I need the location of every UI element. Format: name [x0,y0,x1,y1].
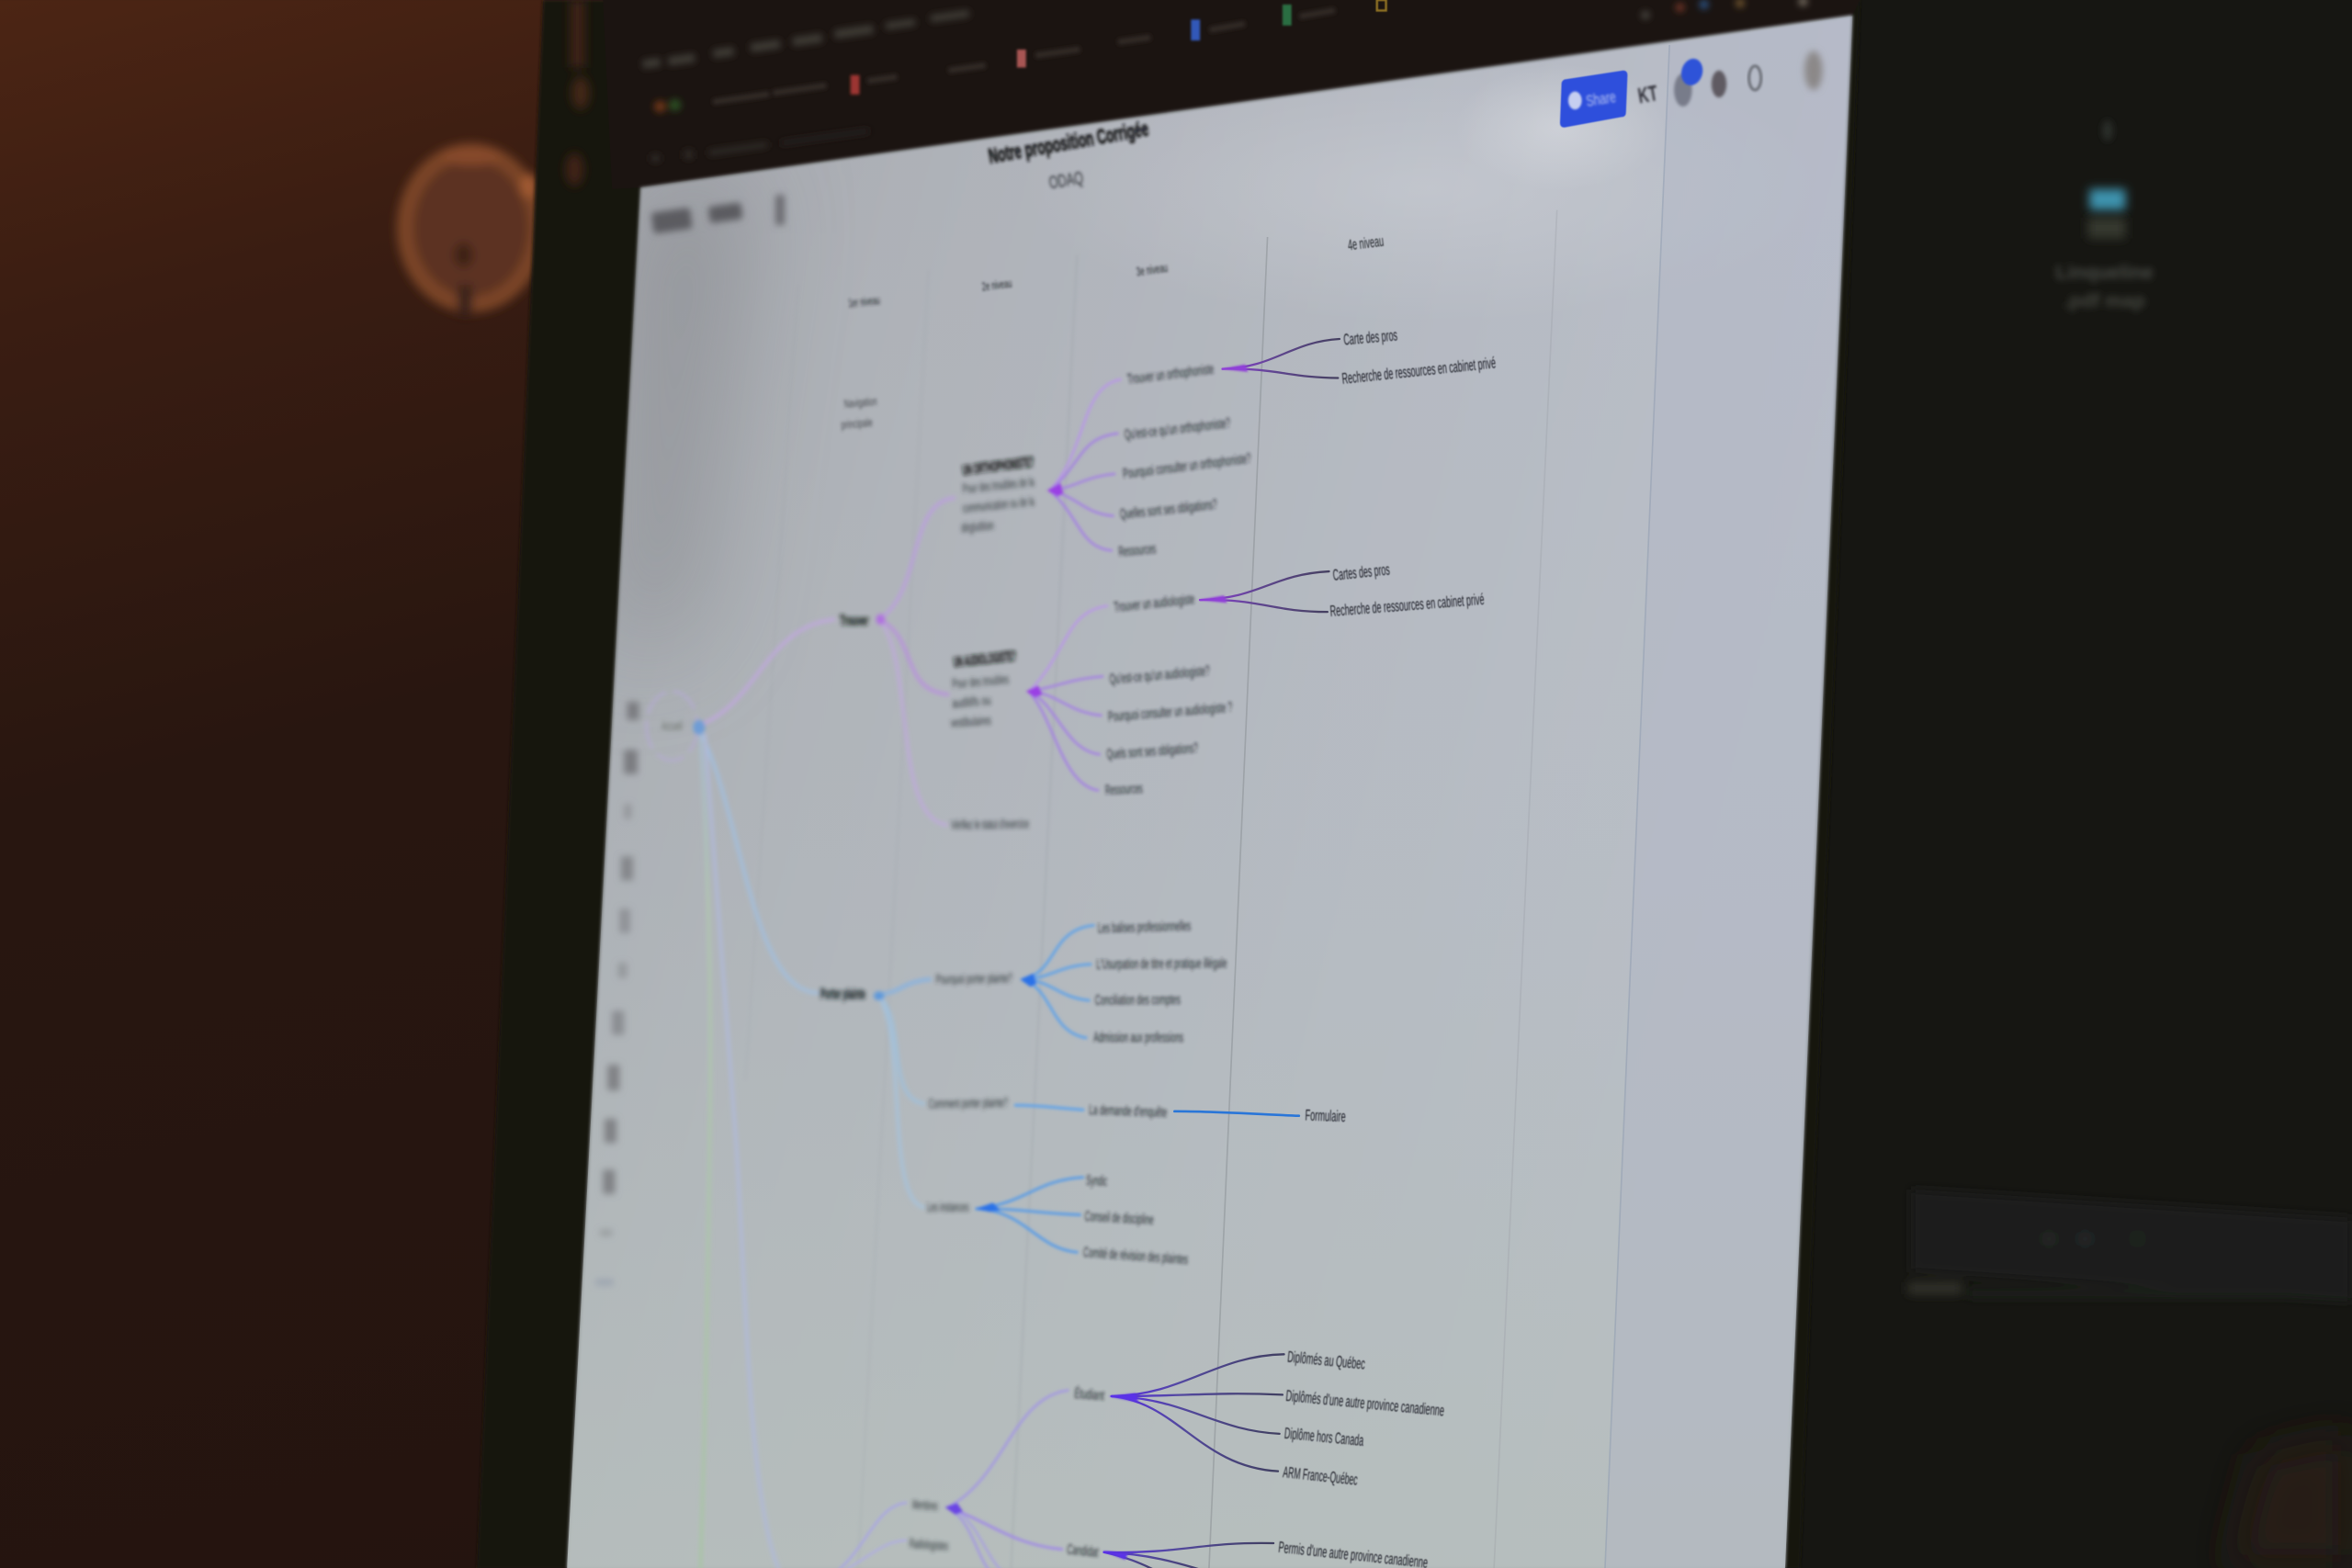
item: Diplôme hors Canada: Diplôme hors Canada [1283,1424,1364,1450]
curves: audiologiste fan [1029,606,1107,790]
desktop dot [2102,120,2113,141]
curve: Trouver un orthophoniste to Carte des pros [1223,339,1340,369]
node: Un orthophoniste: Pour des troubles de la [962,475,1035,497]
lamp outer ring [405,152,537,304]
icon: avatar [1674,73,1692,107]
icon: bell [1712,71,1726,97]
hub: Étudiant [1109,1393,1138,1403]
level 3 labels: purple section [1105,362,1252,798]
band icons [2041,1231,2056,1247]
node: Un orthophoniste: déglutition [960,519,995,536]
hub: Trouver un orthophoniste [1221,365,1248,372]
root description: Navigation [843,394,877,411]
lower screen tint [567,302,1835,1568]
item: L'Usurpation de titre: L'Usurpation de titre et pratique illégale [1096,955,1227,973]
screen shading [555,0,1860,1568]
item: Étudiant: Étudiant [1074,1386,1105,1404]
level 2 labels: Radiologistes [909,1537,949,1554]
item: Ressources: Ressources [1118,541,1157,560]
lamp top highlight [441,147,501,165]
curves: pourquoi porter plainte fan [1023,925,1093,1038]
curve: root to Trouver [697,619,834,726]
right panel tint [1784,17,1852,1568]
curves: Étudiant fan [1112,1354,1284,1396]
mind map curves: level 3 branches [840,379,1121,1568]
node: Un audiologiste [950,648,1017,731]
bookmarks menu [642,9,969,69]
icon: cyan thumbnail [2089,189,2125,210]
node: Un audiologiste: auditifs ou [952,694,991,712]
item: Quelles sont ses obligations: Quelles sont ses obligations? [1119,497,1218,523]
mind map curves: far branches [647,498,954,1568]
header: 3e niveau: 3e niveau [1136,260,1169,278]
hub: instances [975,1202,1001,1212]
header: 2e niveau: 2e niveau [981,276,1012,294]
node: Comment porter plainte: Comment porter plainte? [928,1096,1008,1112]
desktop icon label second line: .pdf map [2064,291,2145,312]
hub: Candidat [1102,1551,1128,1560]
share button [1560,71,1627,128]
item: Formulaire: Formulaire [1305,1106,1346,1125]
tab labels [713,7,1336,105]
item: Pourquoi consulter un audiologiste: Pourquoi consulter un audiologiste ? [1108,700,1233,725]
item: Admission aux professions: Admission aux professions [1093,1031,1183,1046]
icon: search [1749,66,1761,90]
column lines [1116,45,1670,1568]
tab icon: blue [1191,19,1200,40]
curves: Porter plainte branches [877,979,930,994]
share button icon [1568,92,1582,109]
node: Pourquoi porter plainte: Pourquoi porter plainte? [936,972,1012,987]
item: Ressources audiologiste: Ressources [1105,781,1143,798]
top left toolbar [651,195,785,234]
curves: instances fan [977,1178,1083,1252]
tab icon: red [851,75,860,95]
title: Notre proposition Corrigée [987,117,1150,168]
item: Qu'est-ce qu'un orthophoniste: Qu'est-ce qu'un orthophoniste? [1124,415,1231,443]
level 2 labels: Membres [911,1498,938,1514]
root node ring [647,692,697,761]
curve: Trouver un orthophoniste to Recherche [1223,369,1338,378]
node: Un orthophoniste [960,454,1035,536]
band text [1908,1282,1962,1294]
tab icon: green [1283,5,1292,26]
curve: La demande d'enquête to Formulaire [1174,1111,1299,1116]
top right header icons [1636,51,1823,109]
text: Porter plainte [820,986,865,1002]
node: Les instances: Les instances [927,1201,969,1215]
level 1 labels [662,613,869,1002]
left vertical toolbar icons [595,702,639,1285]
hub: porter plainte fan [1020,974,1036,987]
desk reflection lower right [2227,1432,2352,1568]
header: 1er niveau: 1er niveau [848,293,880,310]
node: Un audiologiste: vestibulaires [950,714,991,731]
item: Diplômés d'une autre province canadienne: Diplômés d'une autre province canadienne [1285,1386,1445,1419]
node: Trouver: Trouver [840,613,869,629]
background: dark right side [1770,0,2352,1568]
item: Trouver un audiologiste: Trouver un audiologiste [1114,592,1195,615]
item: La demande d'enquête: La demande d'enquête [1089,1102,1168,1121]
reflected orange streak on bezel [566,0,590,186]
column headers [841,233,1385,432]
item: Recherche de ressources orthophoniste: Recherche de ressources en cabinet privé [1341,353,1497,388]
curve: Trouver un audiologiste to Recherche [1200,600,1328,612]
browser chrome [603,0,1860,189]
item: Quels sont ses obligations: Quels sont ses obligations? [1106,740,1199,762]
level 1 labels: Accueil [662,719,683,734]
hub: orthophoniste [1047,483,1064,496]
item: Syndic: Syndic [1086,1173,1108,1190]
desktop icon on the right [2056,120,2154,312]
share button body [1560,71,1627,128]
curves: Trouver branches [879,498,954,619]
hub: Membres [945,1503,963,1515]
item: Trouver un orthophoniste: Trouver un orthophoniste [1126,362,1215,388]
item: ARM France-Québec: ARM France-Québec [1283,1462,1359,1489]
item: Cartes des pros: Cartes des pros [1332,559,1391,584]
root description [841,394,877,432]
hub: Porter plainte [874,991,884,1000]
lamp bottom gap [458,285,472,315]
band [1911,1190,2352,1302]
lamp highlight [521,174,538,198]
item: Conseil de discipline: Conseil de discipline [1084,1209,1154,1228]
lamp interior [401,147,541,309]
screen background [567,15,1852,1568]
curve: lavender trunk [705,735,778,1568]
curve: comment porter plainte [1015,1105,1083,1110]
monitor bezel [477,0,1860,1568]
item: Qu'est-ce qu'un audiologiste: Qu'est-ce qu'un audiologiste? [1109,663,1211,688]
root description: principale [841,415,873,432]
curve: Trouver un audiologiste to Cartes des pros [1200,571,1329,600]
item: Les balises professionnelles: Les balises professionnelles [1098,919,1192,937]
item: Conciliation des comptes: Conciliation des comptes [1095,992,1181,1009]
level 2 labels [909,454,1035,1554]
item: Diplômés au Québec: Diplômés au Québec [1286,1348,1366,1373]
bright area around share button [1507,94,1615,158]
hub: Trouver un audiologiste [1198,595,1227,603]
browser extension icons [1641,0,1807,19]
tab icon: yellow [1377,0,1386,10]
hub: root [693,720,705,735]
level 2 labels: UN AUDIOLOGISTE? [953,648,1017,671]
text: UN ORTHOPHONISTE? [961,454,1035,479]
level 4 labels [1278,325,1497,1568]
dark top-left vignette along the edge [607,173,750,660]
curve: green trunk [700,735,710,1568]
subtitle: ODAQ [1047,168,1085,194]
hub: audiologiste [1026,685,1043,697]
item: Recherche de ressources audiologiste: Recherche de ressources en cabinet privé [1329,590,1485,620]
curves: orthophoniste fan [1050,379,1121,550]
item: Comité de révision des plaintes: Comité de révision des plaintes [1082,1245,1189,1268]
curves: Candidat fan [1104,1543,1273,1552]
browser chrome fill [603,0,1860,189]
desktop icon label: Linqueline [2056,263,2154,284]
node: Un orthophoniste: communication ou de la [962,494,1035,516]
item: Carte des pros: Carte des pros [1342,325,1398,349]
tab icon: pink [1017,50,1026,68]
item: Pourquoi consulter un orthophoniste: Pourquoi consulter un orthophoniste? [1122,451,1252,482]
desktop lower band [1908,1190,2352,1302]
bright band at top of the canvas [1270,137,1559,237]
share button label: Share [1585,87,1617,110]
mind map curves: level 4 branches [1102,339,1340,1568]
curve: root to Porter plainte [697,726,818,993]
level 3 labels: blue section [1066,919,1227,1561]
curves: Membres branches [948,1391,1068,1507]
level 2 labels: Vérifiez le statut d'exercice [951,817,1029,833]
icon: notification badge [1679,56,1705,88]
item: Candidat: Candidat [1066,1542,1100,1561]
lamp dark spot [455,243,472,267]
icon: desktop file [2088,218,2125,239]
icon: menu [1804,51,1823,90]
lamp disc [401,147,541,315]
address bar [651,129,870,162]
header: 4e niveau: 4e niveau [1347,233,1385,254]
icon: user initials: KT [1636,81,1659,109]
traffic dots [654,99,681,112]
node: Un audiologiste: Pour des troubles [952,672,1010,692]
hub: Trouver [876,615,885,625]
